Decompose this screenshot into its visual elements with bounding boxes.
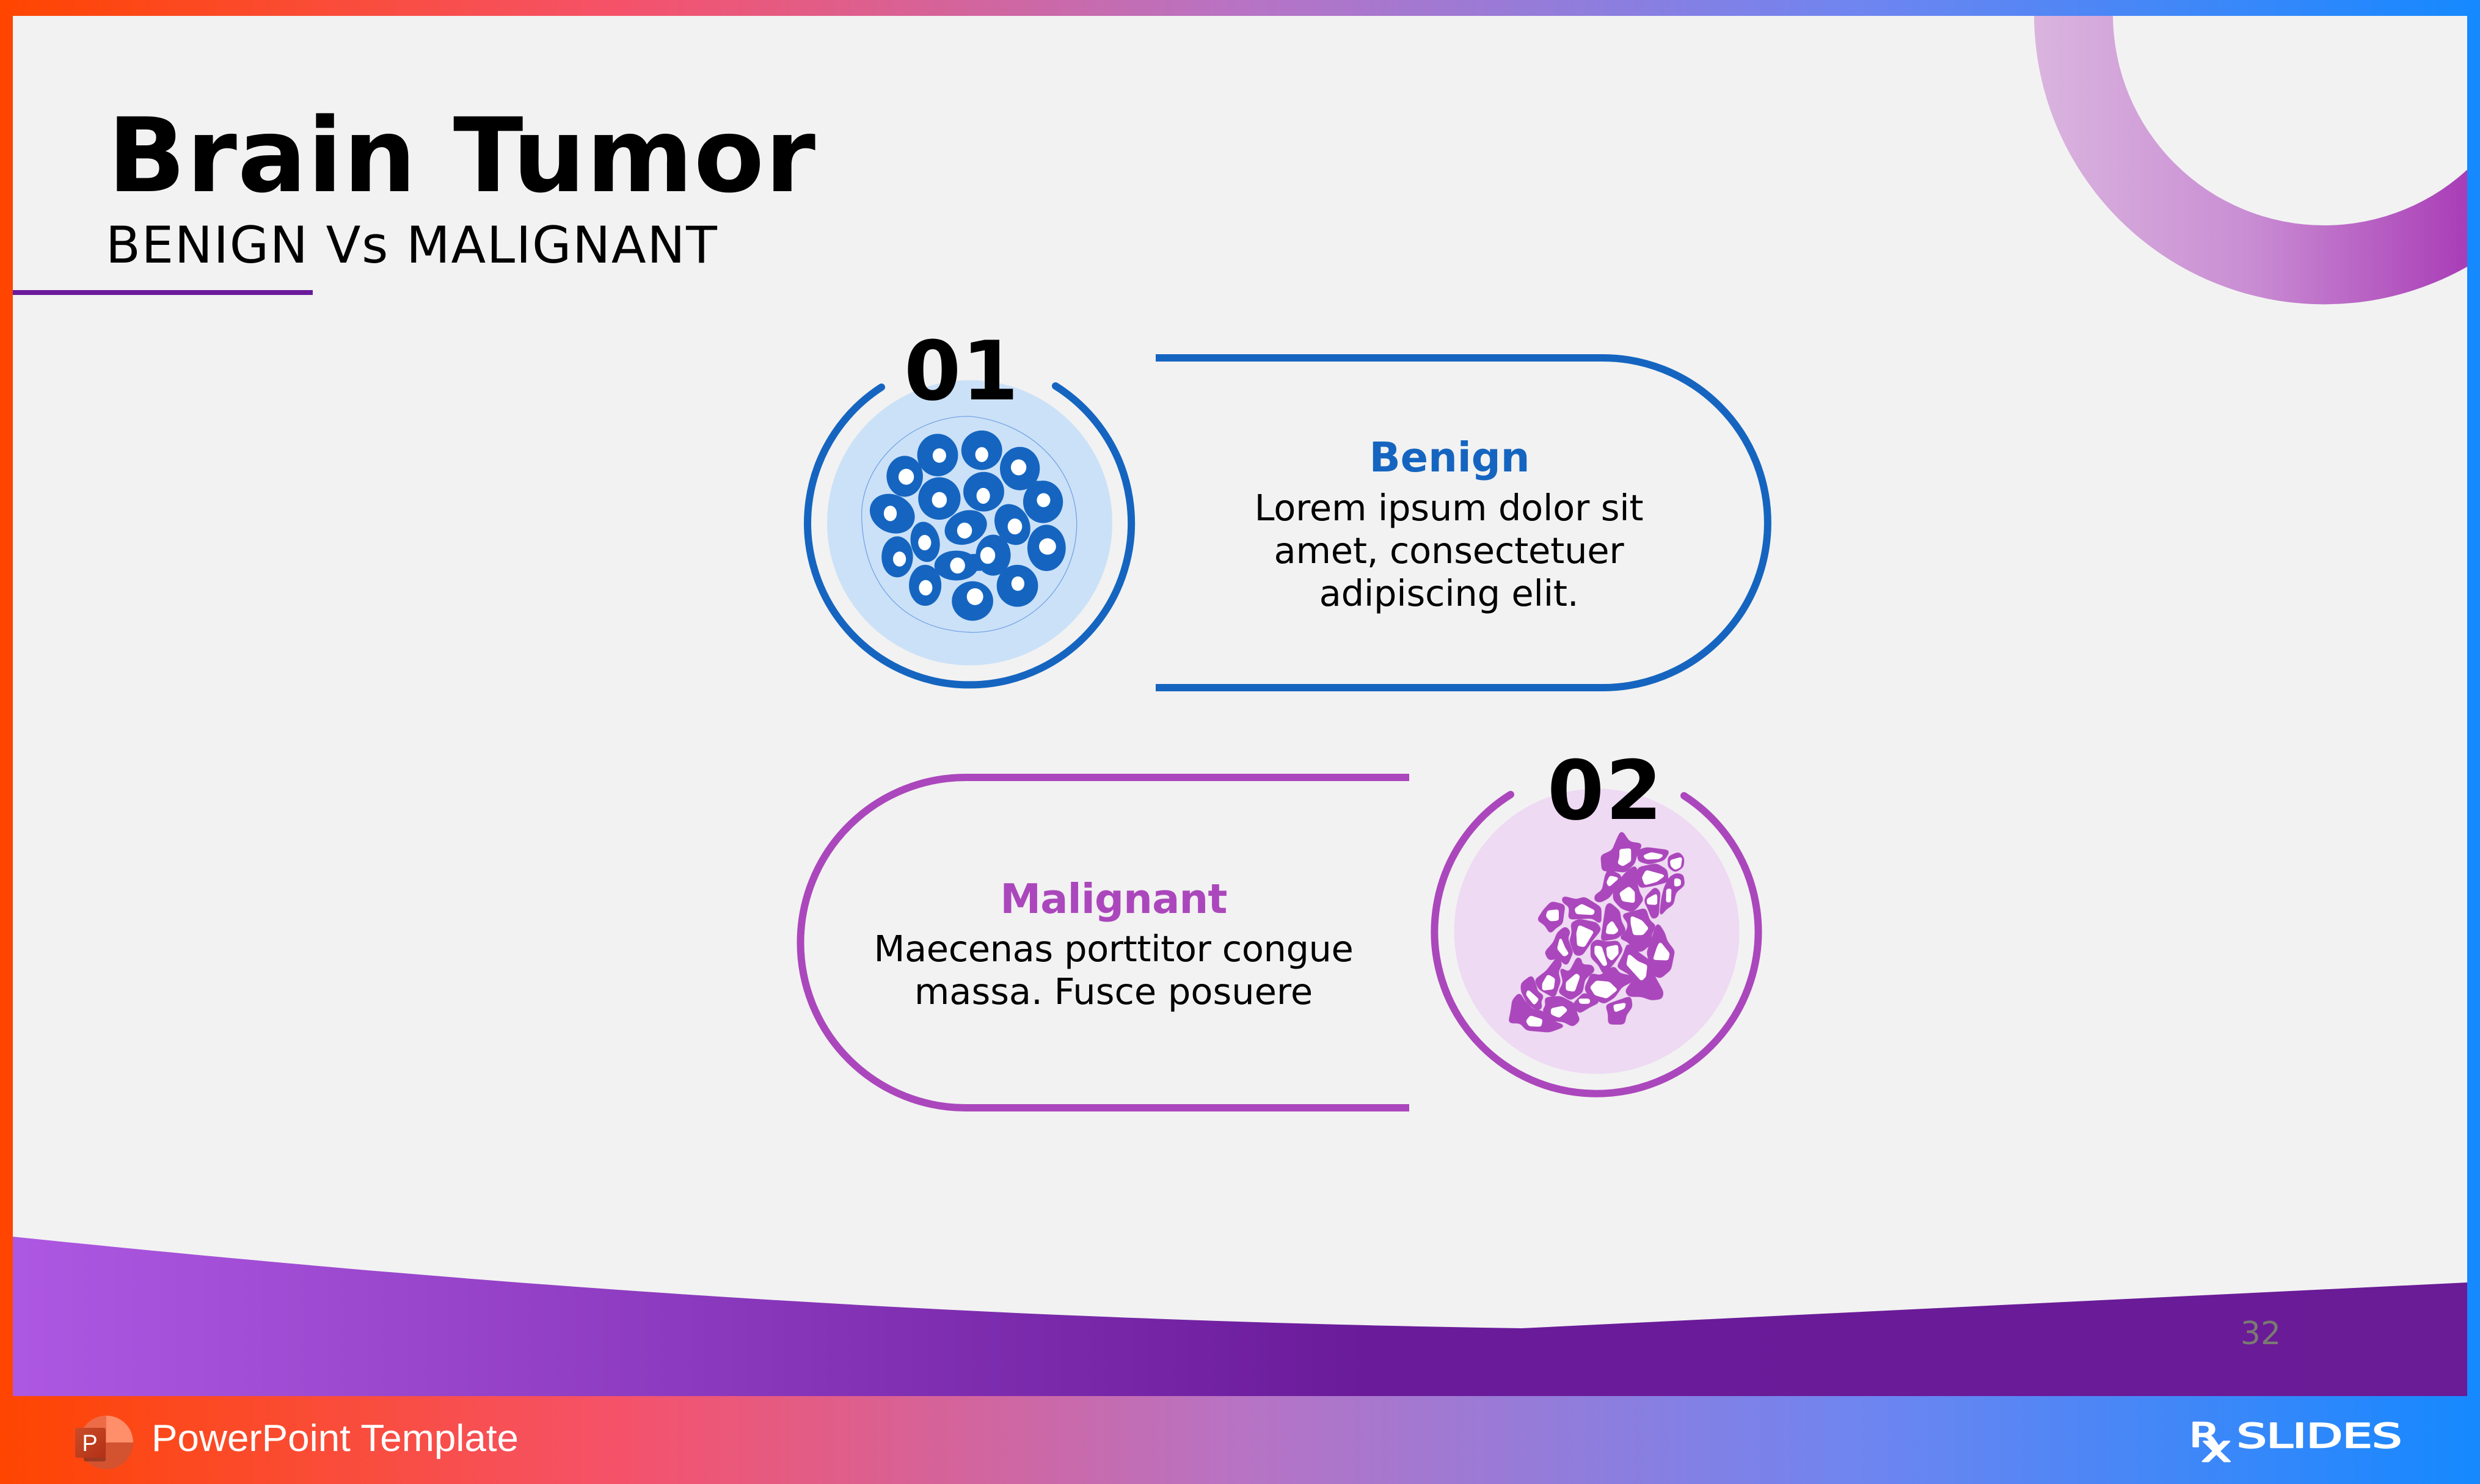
malignant description: Maecenas porttitor congue <box>874 928 1353 970</box>
left edge bar <box>0 0 13 1484</box>
benign heading: Benign <box>1369 434 1530 481</box>
icon: benign cells <box>862 416 1077 632</box>
right edge bar <box>2467 0 2480 1484</box>
icon: PowerPoint logo: P <box>82 1431 98 1457</box>
logo: RxSlides: SLIDES <box>2237 1417 2402 1455</box>
page number: 32 <box>2241 1315 2281 1352</box>
benign description: adipiscing elit. <box>1319 572 1578 614</box>
panel: malignant <box>801 743 1758 1108</box>
title: Brain Tumor <box>108 96 816 216</box>
benign pill outline <box>1156 358 1768 688</box>
top gradient bar <box>0 0 2480 16</box>
panel: benign <box>808 324 1768 688</box>
malignant circle background <box>1454 789 1740 1074</box>
icon: malignant cells <box>1509 831 1684 1031</box>
bottom purple wave <box>13 1237 2467 1396</box>
logo: RxSlides: x <box>2201 1428 2231 1471</box>
malignant heading: Malignant <box>1000 875 1227 923</box>
subtitle: BENIGN Vs MALIGNANT <box>106 216 718 275</box>
corner ring decoration <box>2034 0 2480 304</box>
benign description: Lorem ipsum dolor sit <box>1255 487 1643 529</box>
logo: RxSlides: R <box>2189 1416 2220 1455</box>
title underline <box>13 290 313 295</box>
footer label: PowerPoint Template <box>151 1417 519 1460</box>
icon: PowerPoint logo <box>75 1416 133 1469</box>
benign circle background <box>827 380 1112 666</box>
number 01: 01 <box>904 324 1019 419</box>
malignant description: massa. Fusce posuere <box>914 970 1313 1013</box>
logo: RxSlides <box>2189 1416 2402 1471</box>
footer bar <box>0 1396 2480 1484</box>
malignant pill outline <box>801 777 1409 1108</box>
benign ring arc <box>808 386 1131 685</box>
malignant ring arc <box>1434 795 1758 1094</box>
number 02: 02 <box>1547 743 1663 838</box>
benign description: amet, consectetuer <box>1274 529 1624 572</box>
